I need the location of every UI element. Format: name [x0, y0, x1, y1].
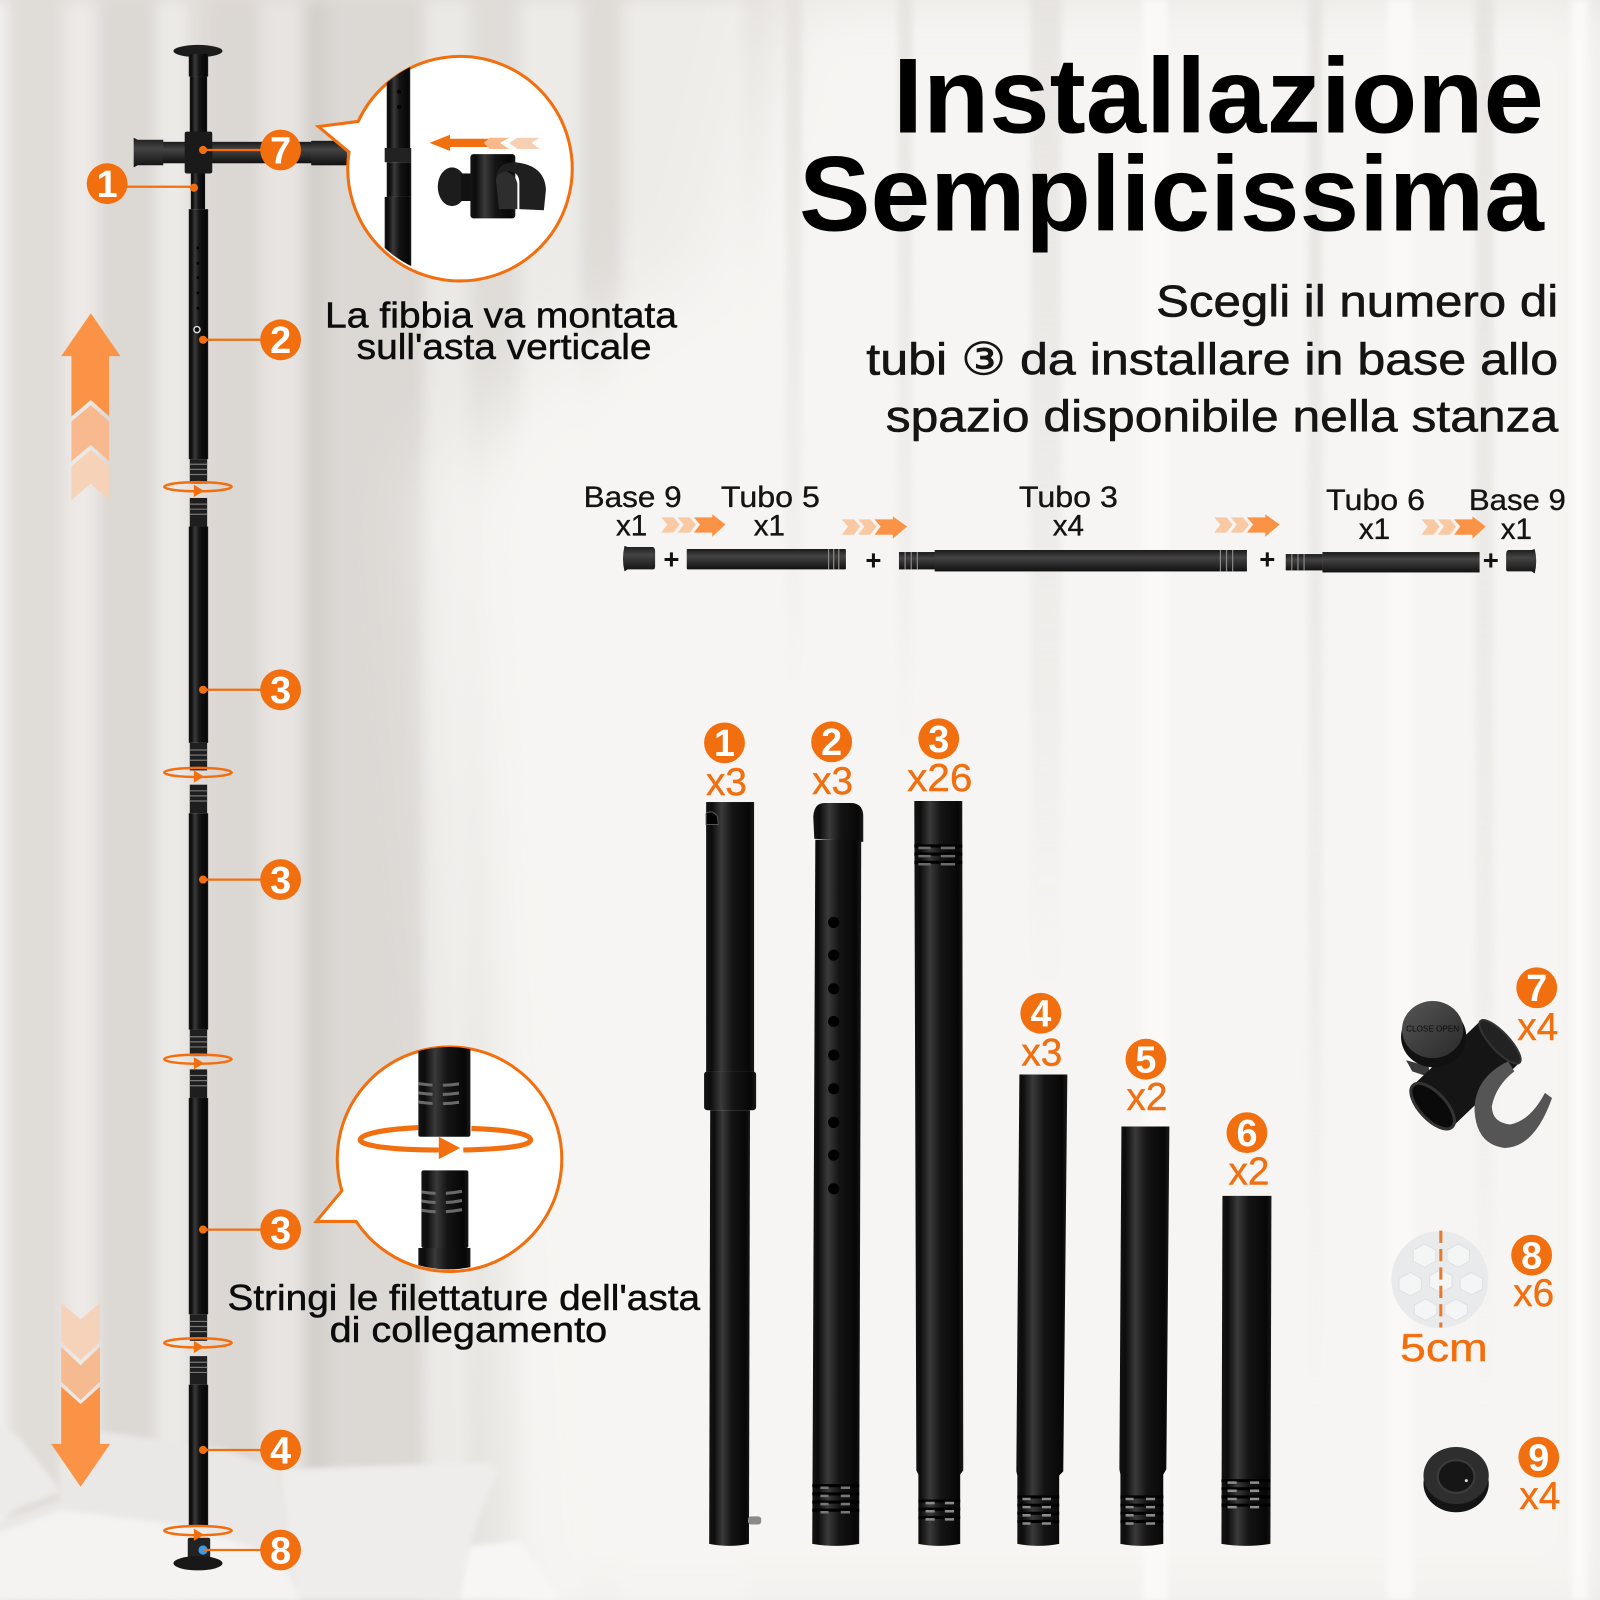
callout: buckle on vertical pole: [318, 51, 572, 284]
callouts on the assembled pole: 4: [270, 1429, 291, 1471]
assembly labels: x1: [616, 510, 647, 543]
assembly labels: x1: [754, 510, 785, 543]
caption: buckle: [325, 296, 677, 367]
subtitle: Scegli il numero di: [1156, 275, 1558, 326]
assembly labels: Base 9: [1469, 484, 1566, 517]
title: Semplicissima: [799, 134, 1545, 254]
assembly labels: [584, 481, 1566, 546]
title: Installazione: [893, 36, 1544, 156]
assembly row plus signs: +: [865, 544, 882, 575]
part quantities: x26: [907, 757, 972, 800]
callouts on the assembled pole: 3: [270, 859, 291, 901]
subtitle: spazio disponibile nella stanza: [886, 391, 1558, 442]
bright area behind the parts: [429, 0, 1600, 1600]
part 2 tube: [812, 803, 863, 1546]
caption: threads: Stringi le filettature dell'asta: [228, 1278, 700, 1318]
assembled pole: [134, 45, 347, 1570]
part number badges: 2: [821, 721, 842, 763]
down arrow: [51, 1303, 110, 1487]
assembly row plus signs: +: [663, 543, 679, 574]
assembly labels: x1: [1359, 513, 1390, 546]
part 7 clip: [1401, 1001, 1552, 1148]
part number badges: 8: [1521, 1234, 1542, 1276]
part quantities: x4: [1519, 1475, 1560, 1518]
part 3 tube: [914, 801, 963, 1546]
callouts on the assembled pole: 7: [270, 129, 291, 171]
assembly labels: Tubo 5: [721, 481, 820, 514]
part 8 adhesive disc: [1391, 1231, 1488, 1328]
part number badges: 1: [714, 722, 735, 764]
part 4 tube: [1016, 1074, 1067, 1546]
part number badges: 4: [1030, 993, 1051, 1035]
title: [799, 36, 1545, 254]
part quantities: x3: [1021, 1031, 1062, 1074]
part 1 tube: [704, 802, 761, 1546]
callouts on the assembled pole: 2: [270, 319, 291, 361]
assembly labels: Tubo 6: [1326, 484, 1425, 517]
part quantities: [706, 757, 1560, 1518]
callout: tighten threads: [316, 1041, 562, 1279]
part number badges: 3: [928, 718, 949, 760]
callouts on the assembled pole: 3: [270, 1209, 291, 1251]
part 9 base cap: [1423, 1447, 1489, 1512]
part number badges: [704, 718, 1559, 1478]
caption: threads: di collegamento: [330, 1310, 607, 1350]
part quantities: x2: [1126, 1076, 1167, 1119]
assembly row plus signs: +: [1483, 544, 1499, 575]
part quantities: x3: [706, 761, 747, 804]
caption: buckle: sull'asta verticale: [357, 327, 652, 367]
part quantities: x3: [812, 760, 853, 803]
part quantities: x2: [1229, 1151, 1269, 1194]
part 5 tube: [1119, 1127, 1169, 1546]
caption: threads: [228, 1278, 700, 1350]
subtitle: [866, 275, 1558, 442]
part 6 tube: [1221, 1196, 1271, 1546]
part number badges: 9: [1528, 1436, 1549, 1478]
assembly labels: x1: [1501, 513, 1532, 546]
assembly row parts: [623, 546, 1536, 573]
caption: buckle: La fibbia va montata: [325, 296, 677, 336]
part quantities: x4: [1517, 1006, 1558, 1049]
assembly row arrows: [661, 514, 1486, 539]
callouts on the assembled pole: 8: [270, 1529, 291, 1571]
subtitle: tubi ③ da installare in base allo: [866, 333, 1558, 384]
callouts on the assembled pole: 1: [97, 163, 118, 205]
part number badges: 7: [1526, 967, 1547, 1009]
part 7 clip: CLOSE OPEN: [1406, 1025, 1459, 1034]
rotation rings: [164, 482, 232, 1541]
assembly row plus signs: +: [1259, 543, 1275, 574]
assembly labels: Base 9: [584, 481, 682, 514]
disc size label: 5cm: [1400, 1327, 1488, 1370]
assembly row plus signs: [663, 543, 1499, 575]
callouts on the assembled pole: [87, 129, 301, 1571]
assembly labels: x4: [1053, 510, 1084, 543]
callouts on the assembled pole: 3: [270, 669, 291, 711]
sofa: [0, 1418, 561, 1600]
assembly labels: Tubo 3: [1019, 481, 1118, 514]
up arrow: [61, 313, 120, 500]
part quantities: x6: [1513, 1272, 1554, 1315]
leader lines: [107, 146, 265, 1550]
part number badges: 5: [1135, 1038, 1156, 1080]
part number badges: 6: [1236, 1112, 1257, 1154]
